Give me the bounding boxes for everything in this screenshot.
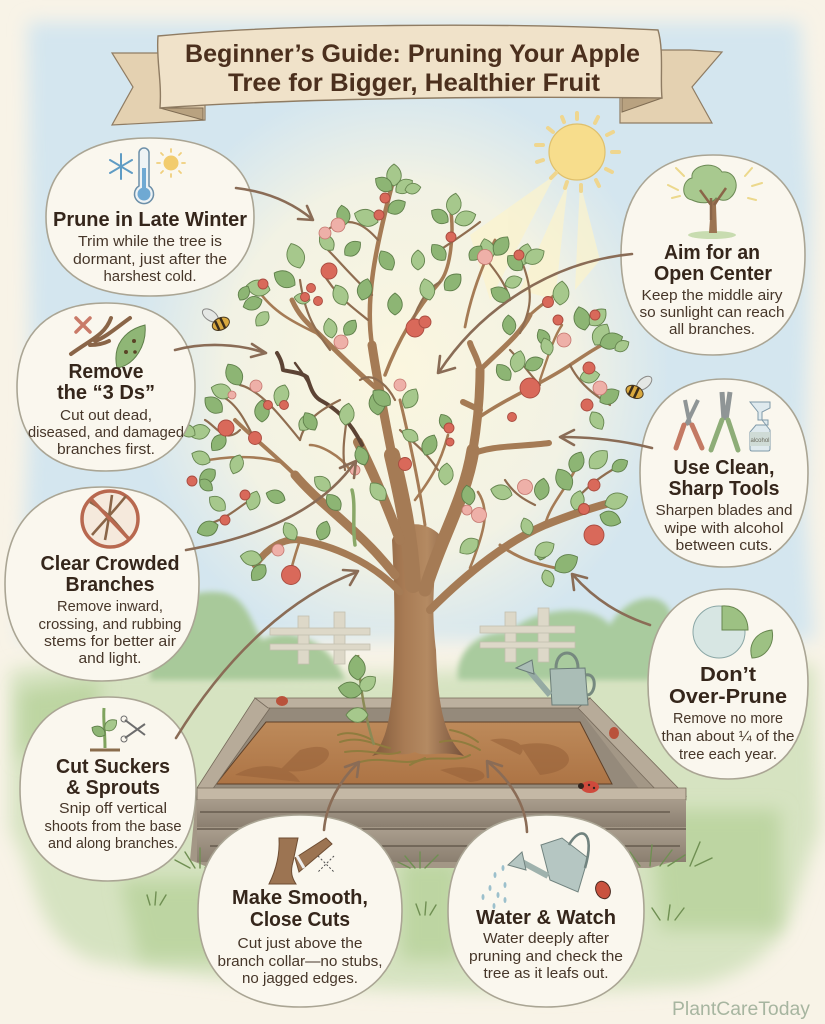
callout: make smooth close cuts: branch collar—no stubs,	[218, 953, 382, 970]
title banner	[112, 25, 722, 125]
callout: use clean sharp tools: Use Clean,	[674, 457, 774, 479]
callout: remove the 3 Ds: branches first.	[57, 441, 155, 458]
garden fence right	[480, 608, 575, 662]
callout: clear crowded branches	[5, 487, 199, 681]
bee left	[198, 300, 232, 336]
arrow: clear to center	[186, 461, 356, 550]
callout: aim for an open center: all branches.	[669, 321, 755, 338]
icon: crossed branches prohibition	[82, 491, 138, 547]
sunlight glow behind tree	[130, 80, 670, 660]
callout: clear crowded branches: Remove inward,	[57, 598, 163, 615]
callout: prune in late winter: dormant, just after the	[73, 251, 227, 268]
green sucker	[352, 490, 355, 545]
callout: water and watch: Water deeply after	[483, 930, 609, 947]
icon: pie chart and leaf	[693, 606, 773, 658]
arrow: suckers to trunk	[176, 570, 358, 738]
ladybug on far left corner	[276, 696, 288, 706]
icon: sun	[536, 113, 619, 191]
callout: clear crowded branches: Clear Crowded	[40, 553, 180, 575]
icon: pruners, loppers, spray bottle	[676, 392, 770, 451]
callout: make smooth close cuts: Close Cuts	[250, 909, 350, 931]
grass tufts	[147, 842, 712, 920]
watercolor sky	[20, 22, 815, 640]
darker grass patches	[20, 680, 780, 960]
callout: remove the 3 Ds: Remove	[68, 361, 144, 383]
ladybug on front rim	[578, 781, 599, 793]
blossoms	[228, 218, 607, 556]
callout: water and watch: Water & Watch	[476, 907, 616, 929]
callout: prune in late winter	[46, 138, 254, 296]
callout: aim for an open center: Open Center	[654, 263, 772, 285]
callout: use clean sharp tools: Sharpen blades and	[656, 502, 792, 519]
callout: water and watch: tree as it leafs out.	[484, 965, 608, 982]
watermark: PlantCareToday	[672, 999, 810, 1020]
main limbs	[198, 185, 622, 610]
callout: cut suckers and sprouts: shoots from the base	[44, 818, 182, 835]
arrow: open center	[438, 254, 632, 373]
callout: use clean sharp tools: Sharp Tools	[668, 478, 780, 500]
icon: sprout and scissors	[90, 708, 145, 750]
icon: pruners, loppers, spray bottle: alcohol	[750, 438, 770, 444]
callout: make smooth close cuts: Make Smooth,	[232, 887, 368, 909]
callout: don't over-prune	[648, 589, 808, 779]
arrow: over-prune to tree	[572, 574, 650, 625]
callout: clear crowded branches: stems for better air	[44, 633, 176, 650]
icon: x, dead twig, diseased leaf	[71, 318, 145, 368]
callout: use clean sharp tools: between cuts.	[676, 537, 772, 554]
icon: small open tree	[668, 165, 762, 239]
callout: cut suckers and sprouts	[20, 697, 196, 881]
callout: water and watch: pruning and check the	[469, 948, 623, 965]
watering can in background	[516, 653, 594, 705]
callout: aim for an open center: Aim for an	[664, 242, 760, 264]
arrow: tools to cut branch	[560, 430, 652, 448]
grass and meadow	[10, 661, 820, 992]
trunk	[372, 524, 464, 756]
callout: water and watch	[448, 815, 644, 1007]
callout: prune in late winter: Prune in Late Winter	[53, 209, 247, 231]
callout: remove the 3 Ds	[17, 303, 195, 471]
callout: remove the 3 Ds: Cut out dead,	[60, 407, 152, 424]
title banner: Beginner’s Guide: Pruning Your Apple	[185, 40, 640, 68]
callout: prune in late winter: Trim while the tree is	[78, 233, 222, 250]
callout: prune in late winter: harshest cold.	[104, 268, 196, 285]
dead dark branch	[277, 353, 362, 445]
icon: trunk with branch collar cut	[269, 838, 334, 884]
callout: clear crowded branches: crossing, and rubbing	[38, 616, 182, 633]
callout: cut suckers and sprouts: & Sprouts	[66, 777, 160, 799]
seedling	[337, 654, 380, 745]
callout: don't over-prune: Over-Prune	[669, 686, 787, 708]
callout: don't over-prune: Remove no more	[673, 710, 783, 727]
callout: make smooth close cuts: no jagged edges.	[242, 970, 358, 987]
callout: aim for an open center	[621, 155, 805, 355]
callout: don't over-prune: Don’t	[700, 664, 756, 686]
icon: snowflake thermometer sun	[110, 148, 185, 204]
thin twigs	[205, 222, 612, 525]
arrow: cuts to base	[324, 762, 359, 830]
callout: aim for an open center: so sunlight can reach	[640, 304, 784, 321]
mulch	[338, 730, 480, 765]
callout: use clean sharp tools	[640, 379, 808, 567]
callout: cut suckers and sprouts: Cut Suckers	[56, 756, 170, 778]
sun rays beams	[470, 175, 600, 300]
callout: clear crowded branches: Branches	[66, 574, 154, 596]
callout: don't over-prune: tree each year.	[679, 746, 777, 763]
leaves	[176, 164, 631, 589]
callout: clear crowded branches: and light.	[78, 650, 142, 667]
ladybug on right rim	[609, 727, 619, 739]
callout: don't over-prune: than about ¼ of the	[662, 728, 794, 745]
callout: remove the 3 Ds: diseased, and damaged	[28, 424, 184, 441]
bee right	[624, 368, 656, 403]
callout: aim for an open center: Keep the middle airy	[642, 287, 783, 304]
arrow: water to soil	[487, 761, 527, 832]
garden fence left	[270, 612, 370, 664]
title banner: Tree for Bigger, Healthier Fruit	[228, 69, 601, 97]
icon: watering can with ladybug	[482, 833, 613, 909]
callout: use clean sharp tools: wipe with alcohol	[663, 520, 784, 537]
raised garden bed	[190, 698, 686, 868]
callout: cut suckers and sprouts: Snip off vertical	[59, 800, 167, 817]
callout: make smooth close cuts	[198, 815, 402, 1007]
callout: make smooth close cuts: Cut just above the	[238, 935, 362, 952]
callout: remove the 3 Ds: the “3 Ds”	[57, 382, 155, 404]
apple tree	[176, 164, 631, 765]
arrow: remove to dead branch	[175, 344, 266, 357]
background bushes	[150, 592, 672, 680]
callout: cut suckers and sprouts: and along branches.	[48, 835, 178, 852]
apples and buds	[187, 193, 604, 584]
arrow: prune to crown	[236, 188, 313, 220]
